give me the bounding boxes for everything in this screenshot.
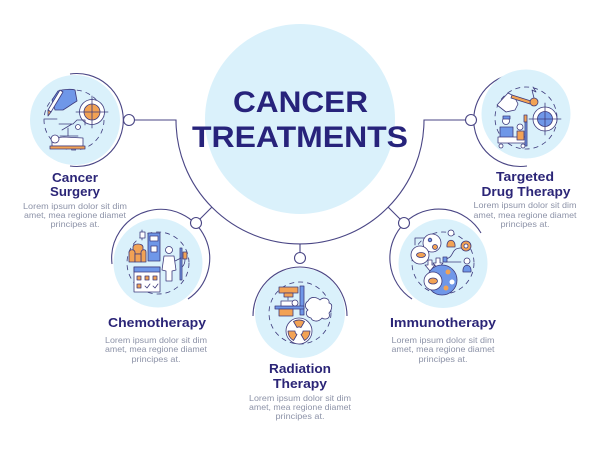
description: Lorem ipsum dolor sit dim bbox=[23, 201, 127, 211]
label: Chemotherapy bbox=[108, 316, 206, 330]
panel: immunotherapy bbox=[390, 209, 496, 364]
icon background and ring bbox=[253, 252, 347, 358]
title: CANCER bbox=[233, 86, 368, 119]
label bbox=[269, 362, 331, 391]
description: amet, mea regione diamet bbox=[105, 344, 208, 354]
icon background and ring bbox=[466, 70, 570, 167]
description bbox=[249, 393, 352, 421]
description: amet, mea regione diamet bbox=[474, 210, 577, 220]
panel: cancer surgery bbox=[23, 73, 134, 229]
description: Lorem ipsum dolor sit dim bbox=[474, 200, 576, 210]
label: Therapy bbox=[273, 377, 327, 391]
title: TREATMENTS bbox=[192, 121, 408, 154]
label bbox=[50, 171, 100, 199]
icon: surgery bbox=[44, 89, 108, 150]
label: Cancer bbox=[52, 171, 98, 185]
description: Lorem ipsum dolor sit dim bbox=[249, 393, 351, 403]
panel: targeted drug therapy bbox=[466, 70, 577, 229]
icon: targeted drug therapy bbox=[495, 87, 561, 149]
label bbox=[482, 170, 571, 199]
description: amet, mea regione diamet bbox=[249, 402, 352, 412]
title bbox=[192, 86, 408, 154]
description bbox=[23, 201, 127, 229]
label: Targeted bbox=[496, 170, 554, 184]
connector arc bbox=[135, 120, 465, 253]
label: Radiation bbox=[269, 362, 331, 376]
description: principes at. bbox=[500, 219, 550, 229]
label: Immunotherapy bbox=[390, 316, 496, 330]
description bbox=[392, 335, 495, 364]
description bbox=[474, 200, 577, 229]
label: Drug Therapy bbox=[482, 185, 571, 199]
description: principes at. bbox=[276, 411, 324, 421]
icon: radiation bbox=[269, 282, 332, 344]
icon background and ring bbox=[390, 209, 488, 308]
panel: chemotherapy bbox=[105, 209, 210, 364]
description: principes at. bbox=[418, 354, 468, 364]
description bbox=[105, 335, 208, 364]
description: principes at. bbox=[132, 354, 180, 364]
label: Surgery bbox=[50, 185, 100, 199]
panel: radiation therapy bbox=[249, 252, 352, 421]
icon background and ring bbox=[30, 73, 134, 166]
icon: chemotherapy bbox=[127, 230, 189, 294]
central circle with title bbox=[192, 24, 408, 214]
description: amet, mea regione diamet bbox=[24, 210, 127, 220]
description: Lorem ipsum dolor sit dim bbox=[105, 335, 207, 345]
icon: immunotherapy bbox=[411, 230, 474, 295]
description: principes at. bbox=[50, 219, 100, 229]
description: Lorem ipsum dolor sit dim bbox=[392, 335, 494, 345]
description: amet, mea regione diamet bbox=[392, 344, 495, 354]
icon background and ring bbox=[112, 209, 210, 308]
